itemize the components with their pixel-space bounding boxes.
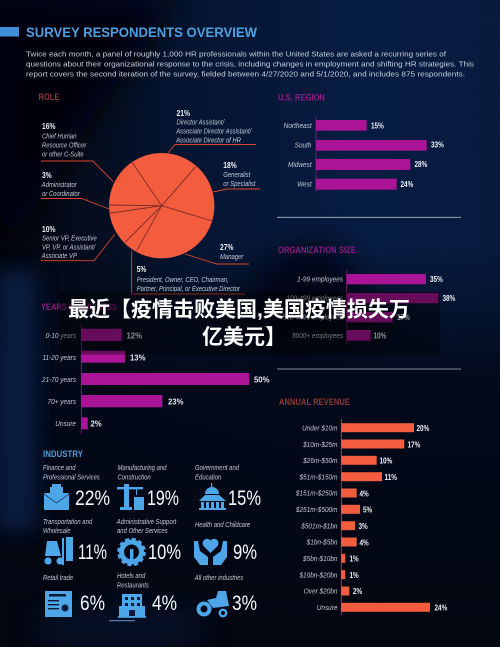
heading: U.S. region: U.S. REGION <box>278 92 325 102</box>
intro paragraph: questions about their organizational response to the crisis, including changes in employment and shifting HR strategies. This <box>26 60 474 68</box>
bar chart: organization size: 5000+ employees <box>292 333 344 340</box>
callout: 21%: 21% <box>177 108 190 118</box>
bar chart: years: 21-70 years <box>41 377 77 384</box>
panel: organization size <box>278 245 456 344</box>
panel: role <box>38 92 260 294</box>
item: administrative 10%: Administrative Support <box>116 518 177 526</box>
accent bar <box>0 27 19 36</box>
callout: 5% <box>132 251 245 294</box>
bar chart: years: 0-10 years <box>46 333 77 340</box>
callout: 21% <box>168 108 256 153</box>
bar chart: revenue: 4% <box>359 489 369 499</box>
callout: 21%: Associate Director of HR <box>175 137 241 145</box>
panel: annual revenue <box>279 397 448 615</box>
icon: cash register <box>45 591 72 617</box>
callout: 21%: Director Assistant/ <box>176 119 225 127</box>
icon: tractor <box>198 591 229 616</box>
bar chart: revenue: 4% <box>359 538 369 548</box>
icon: capitol building <box>199 483 226 510</box>
callout: 16%: 16% <box>42 121 56 131</box>
callout: 3%: or Coordinator <box>42 190 80 198</box>
bar chart: revenue: 10% <box>379 456 393 466</box>
heading: role: ROLE <box>38 92 60 102</box>
icon: hotel <box>118 594 146 618</box>
bar chart: organization size <box>283 270 456 344</box>
item: government 15% <box>195 464 261 510</box>
item: health 9%: 9% <box>233 541 257 564</box>
bar chart: revenue <box>295 419 448 615</box>
bar chart: years: 23% <box>168 397 184 407</box>
callout: 18%: or Specialist <box>223 180 256 188</box>
bar chart: years: 11-20 years <box>42 355 76 362</box>
intro paragraph <box>26 50 474 78</box>
item: hotels 4%: 4% <box>152 592 177 615</box>
bar chart: organization size: 500-4999 employees <box>283 314 344 322</box>
item: finance 22% <box>43 464 110 510</box>
callout: 10%: VP, VP, or Assistant/ <box>42 244 96 252</box>
icon: crane <box>117 484 144 510</box>
item: government 15%: Government and <box>195 464 239 472</box>
item: manufacturing 19%: 19% <box>147 487 179 510</box>
item: hotels 4%: Restaurants <box>117 582 149 590</box>
callout: 27%: 27% <box>220 242 234 252</box>
heading: organization size: ORGANIZATION SIZE <box>278 245 356 255</box>
item: transportation 11%: Transportation and <box>43 518 92 526</box>
callout: 3% <box>41 170 109 209</box>
bar chart: organization size: 38% <box>443 293 456 303</box>
bar chart: region: 33% <box>431 140 444 150</box>
heading: survey respondents overview: SURVEY RESPONDENTS OVERVIEW <box>26 25 257 40</box>
item: hotels 4%: Hotels and <box>117 572 145 580</box>
callout: 10% <box>41 224 115 261</box>
bar chart: organization size: 35% <box>430 274 443 284</box>
item: hotels 4% <box>109 572 177 621</box>
bar chart: organization size: 17% <box>397 312 410 322</box>
bar chart: revenue: 5% <box>363 505 373 515</box>
callout: 16% <box>41 121 113 182</box>
callout: 5%: 5% <box>137 264 147 274</box>
item: manufacturing 19% <box>117 464 179 510</box>
item: administrative 10% <box>116 518 181 565</box>
callout: 16%: or other C-Suite <box>42 151 84 159</box>
panel: industry <box>43 449 261 621</box>
bar chart: revenue: $5bn-$10bn <box>302 556 338 563</box>
bar chart: revenue: 20% <box>417 423 430 433</box>
bar chart: years <box>41 324 270 434</box>
item: health 9%: Health and Childcare <box>195 521 250 529</box>
callout: 18% <box>213 160 260 192</box>
callout: 5%: President, Owner, CEO, Chairman, <box>137 276 229 284</box>
bar chart: revenue: $10bn-$20bn <box>299 572 338 580</box>
bar chart: revenue: Unsure <box>317 605 338 612</box>
bar chart: revenue: $26m-$50m <box>302 458 338 465</box>
bar chart: revenue: $151m-$250m <box>295 490 338 498</box>
panel: U.S. region <box>278 92 444 192</box>
bar chart: revenue: 11% <box>384 472 397 482</box>
bar chart: region: South <box>295 142 312 150</box>
bar chart: region: 28% <box>414 159 428 169</box>
overlay title: 亿美元】 <box>202 326 286 349</box>
item: retail 6%: 6% <box>80 592 105 615</box>
bar chart: years: 50% <box>254 375 270 385</box>
item: transportation 11% <box>43 518 107 565</box>
callout: 16%: Resource Officer <box>42 142 87 150</box>
bar chart: region: 24% <box>401 179 414 189</box>
bar chart: revenue: $1bn-$5bn <box>306 539 338 547</box>
header <box>0 25 474 78</box>
bar chart: organization size: 100-499 employees <box>286 295 344 303</box>
bar chart: revenue: $51m-$150m <box>299 474 338 482</box>
bar chart: years: 13% <box>130 353 146 363</box>
bar chart: revenue: 1% <box>349 554 359 564</box>
bar chart: revenue: 3% <box>358 521 368 531</box>
item: retail 6%: Retail trade <box>43 574 73 582</box>
callout: 21%: Associate Director Assistant/ <box>175 128 252 136</box>
item: manufacturing 19%: Construction <box>117 474 151 482</box>
bar chart: revenue: $251m-$500m <box>295 507 338 514</box>
heading: annual revenue: ANNUAL REVENUE <box>279 397 350 407</box>
title overlay <box>60 292 440 354</box>
callout: 5%: Partner, Principal, or Executive Director <box>137 285 241 293</box>
bar chart: years: 70+ years <box>48 399 76 406</box>
bar chart: years: 2% <box>91 419 102 429</box>
item: retail 6% <box>43 574 105 617</box>
intro paragraph: Twice each month, a panel of roughly 1,000 HR professionals within the United States are asked a recurring series of <box>26 50 447 58</box>
callout: 18%: 18% <box>223 160 237 170</box>
callout: 27%: Manager <box>220 253 244 261</box>
bar chart: region: 15% <box>371 121 384 131</box>
callout: 18%: Generalist <box>223 171 251 179</box>
bar chart: region: Midwest <box>288 162 313 169</box>
bar chart: revenue: Over $20bn <box>304 588 338 596</box>
item: finance 22%: Professional Services <box>43 474 100 482</box>
item: administrative 10%: and Other Services <box>117 527 168 535</box>
bar chart: organization size: 10% <box>373 331 387 341</box>
item: finance 22%: Finance and <box>43 464 76 472</box>
bar chart: years: Unsure <box>55 421 76 428</box>
item: transportation 11%: Wholesale <box>43 527 71 535</box>
heading: years in business: YEARS IN BUSINESS <box>41 302 117 312</box>
item: government 15%: 15% <box>228 487 261 510</box>
icon: briefcase <box>44 484 69 510</box>
overlay title: 最近【疫情击败美国,美国疫情损失万 <box>68 298 410 322</box>
bar chart: revenue: $501m-$1bn <box>300 523 338 531</box>
bar chart: region <box>284 117 444 192</box>
item: transportation 11%: 11% <box>78 541 107 564</box>
pie chart <box>109 153 214 258</box>
bar chart: revenue: 17% <box>408 440 421 450</box>
item: other 3% <box>194 574 257 616</box>
callout: 3%: 3% <box>42 170 52 180</box>
icon: forklift <box>44 537 73 565</box>
item: other 3%: 3% <box>232 592 257 615</box>
callout: 10%: 10% <box>42 224 56 234</box>
callout: 10%: Associate VP <box>41 252 77 260</box>
bar chart: revenue: 2% <box>353 586 363 596</box>
bar chart: revenue: 24% <box>434 603 448 613</box>
item: other 3%: All other industries <box>194 574 244 582</box>
panel: years in business <box>41 302 270 434</box>
item: finance 22%: 22% <box>75 487 110 510</box>
item: manufacturing 19%: Manufacturing and <box>117 464 167 472</box>
bar chart: organization size: 1-99 employees <box>297 276 344 284</box>
bar chart: region: Northeast <box>284 123 313 130</box>
item: health 9% <box>194 521 257 565</box>
callout: 10%: Senior VP, Executive <box>42 235 97 243</box>
icon: heart in hands <box>194 539 227 565</box>
intro paragraph: report covers the second iteration of the survey, fielded between 4/27/2020 and 5/1/2020, and includes 875 respondents. <box>26 70 465 78</box>
bar chart: revenue: $10m-$25m <box>302 441 338 449</box>
heading: industry: INDUSTRY <box>43 449 83 459</box>
item: government 15%: Education <box>195 474 221 482</box>
callout: 27% <box>185 242 249 264</box>
bar chart: revenue: Under $10m <box>302 425 338 433</box>
item: administrative 10%: 10% <box>148 541 181 564</box>
icon: gear and wrench <box>118 539 144 565</box>
bar chart: revenue: 1% <box>349 570 359 580</box>
bar chart: years: 12% <box>126 331 143 341</box>
callout: 16%: Chief Human <box>42 133 77 141</box>
callout: 3%: Administrator <box>41 181 77 189</box>
bar chart: region: West <box>297 181 313 189</box>
